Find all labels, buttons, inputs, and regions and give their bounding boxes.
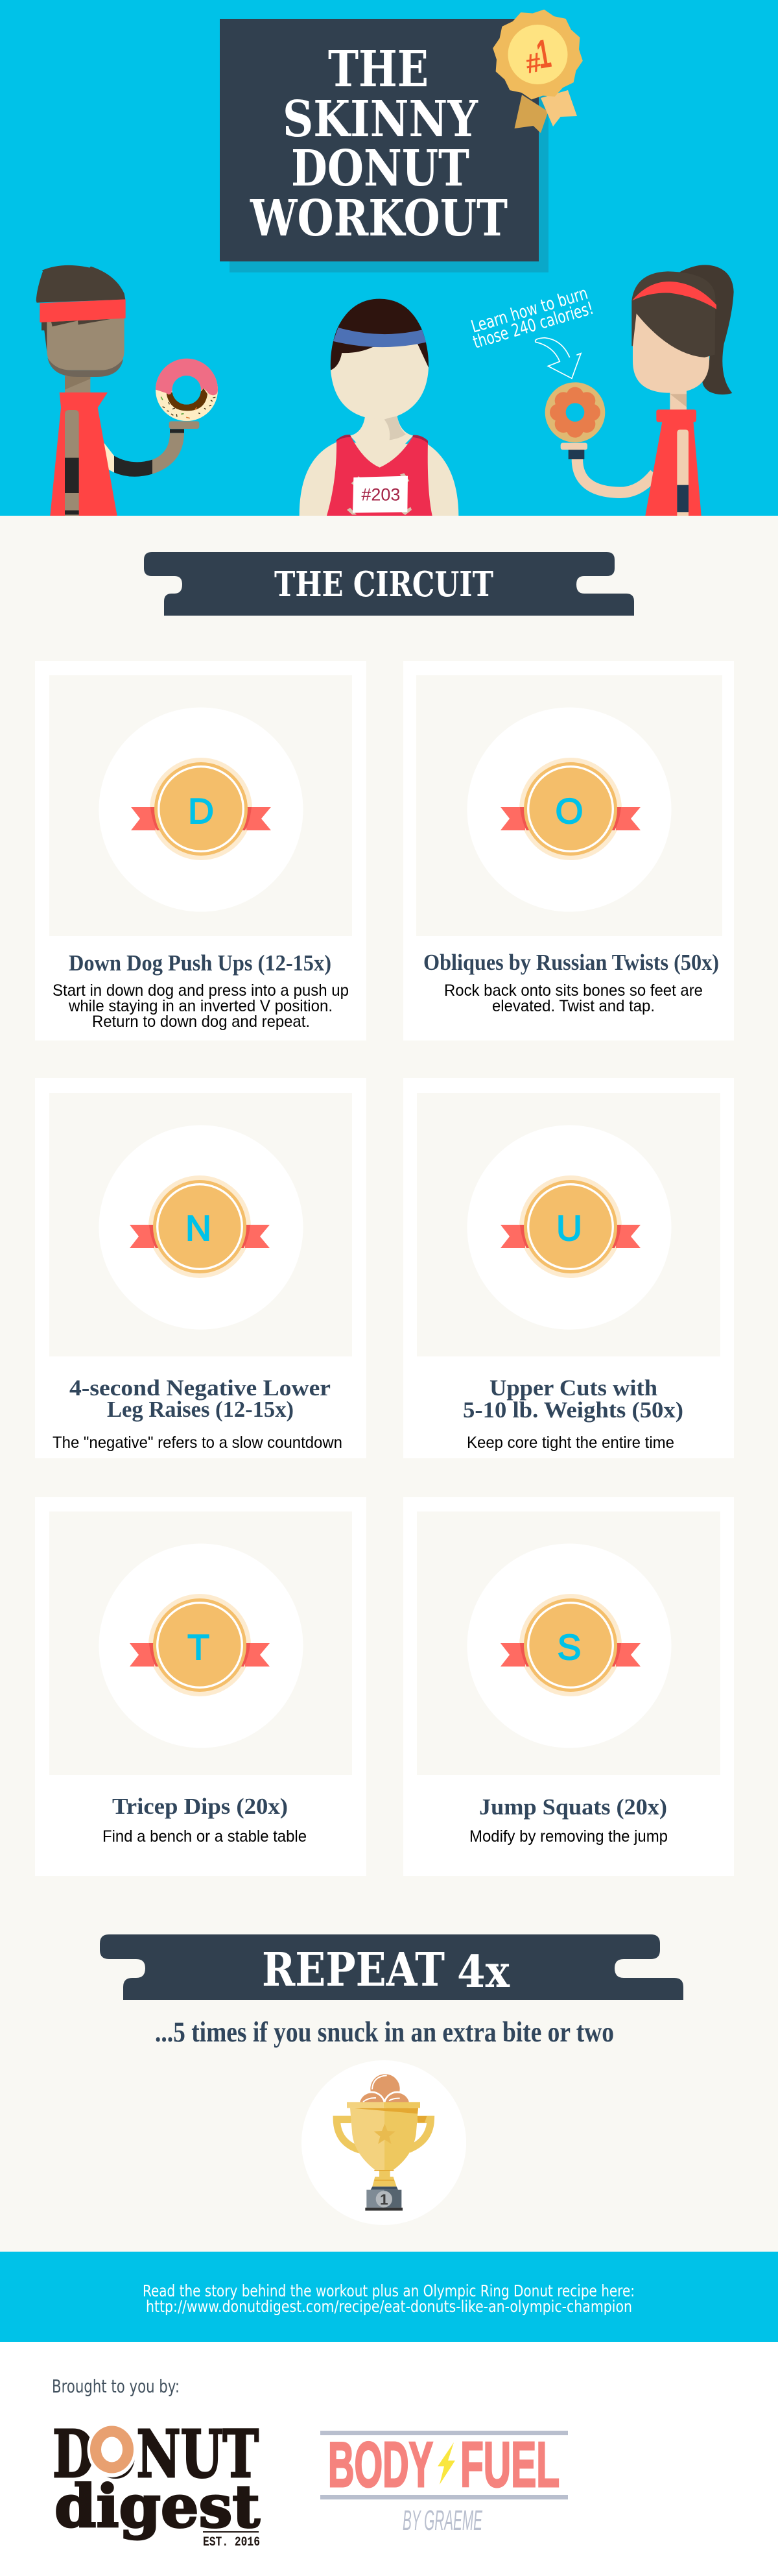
left runner fringe <box>51 319 110 326</box>
icon: number one medal <box>486 3 589 133</box>
link band: http://www.donutdigest.com/recipe/eat-donuts-like-an-olympic-champion <box>146 2297 632 2316</box>
icon: trophy with donuts <box>301 2060 466 2225</box>
donut holes <box>359 2074 410 2118</box>
left runner with pink donut <box>36 265 218 516</box>
text T: Find a bench or a stable table <box>102 1827 307 1846</box>
badge T <box>130 1594 270 1696</box>
logo: body fuel: FUEL <box>460 2429 560 2500</box>
badge S: S <box>558 1627 581 1667</box>
text D: Start in down dog and press into a push up <box>53 981 349 1000</box>
race bib #203: #203 <box>361 485 400 505</box>
left runner headband <box>40 299 126 322</box>
trophy base <box>365 2187 403 2211</box>
badge U <box>501 1175 641 1278</box>
section background <box>0 516 778 2252</box>
badge D <box>131 758 271 860</box>
right runner face <box>633 305 709 393</box>
badge U: U <box>556 1208 582 1248</box>
title T: Tricep Dips (20x) <box>112 1794 288 1819</box>
icon: pink frosted donut <box>156 359 218 421</box>
heading: repeat 4x: 4x <box>457 1946 510 1998</box>
logo: donut digest: digest <box>54 2472 260 2541</box>
badge T: T <box>187 1627 209 1667</box>
icon: number one medal: 1 <box>534 31 554 78</box>
right runner with glazed donut <box>536 265 734 516</box>
title N: Leg Raises (12-15x) <box>107 1397 294 1422</box>
title panel: WORKOUT <box>250 189 508 248</box>
panel: D down dog push ups <box>35 661 366 1041</box>
title panel: DONUT <box>291 139 469 198</box>
text O <box>444 981 703 1015</box>
callout: burn calories: Learn how to burn <box>469 283 590 337</box>
icon: orange glazed donut <box>545 382 605 442</box>
title panel <box>220 19 548 272</box>
donut letter O <box>87 2422 136 2477</box>
text S: Modify by removing the jump <box>469 1827 668 1846</box>
heading: repeat 4x: REPEAT <box>262 1942 445 1997</box>
hero background <box>0 0 778 516</box>
link band <box>0 2252 778 2342</box>
badge S <box>501 1594 641 1696</box>
right runner shirt <box>645 409 701 516</box>
panel: T tricep dips <box>35 1497 366 1876</box>
title O: Obliques by Russian Twists (50x) <box>423 950 719 975</box>
text O: elevated. Twist and tap. <box>492 997 655 1015</box>
footer background <box>0 2342 778 2576</box>
left runner hair <box>36 265 125 352</box>
centre runner hair <box>331 299 429 370</box>
subheading: extra bite: ...5 times if you snuck in an extra bite or two <box>155 2016 614 2048</box>
centre runner tank top <box>327 435 432 516</box>
right runner raised arm <box>561 443 655 492</box>
left runner raised arm <box>102 421 199 477</box>
logo: body fuel <box>320 2429 568 2536</box>
right runner headband <box>632 282 716 309</box>
text U: Keep core tight the entire time <box>467 1434 674 1452</box>
title U: Upper Cuts with <box>489 1375 657 1401</box>
logo: donut digest: EST. 2016 <box>203 2535 260 2550</box>
panel: O obliques <box>403 661 734 1041</box>
title S: Jump Squats (20x) <box>479 1794 667 1820</box>
title N: 4-second Negative Lower <box>69 1375 331 1401</box>
right runner lowered arm <box>677 429 689 516</box>
race bib #203 <box>347 473 412 515</box>
left runner face <box>47 318 124 370</box>
right runner neck <box>670 391 687 410</box>
title panel: THE <box>328 40 429 99</box>
text N: The "negative" refers to a slow countdown <box>53 1434 342 1452</box>
left runner neck <box>65 375 90 394</box>
panel: N negative leg raises <box>35 1078 366 1458</box>
left runner chin shadow <box>47 358 123 377</box>
heading: the circuit <box>144 552 634 616</box>
icon: number one medal: # <box>523 47 543 79</box>
centre runner face <box>331 344 429 418</box>
heading: repeat 4x <box>100 1934 683 2000</box>
credit label: Brought to you by: <box>52 2376 180 2397</box>
logo: body fuel: BY GRAEME <box>403 2505 482 2536</box>
title U <box>463 1375 683 1423</box>
logo: donut digest <box>53 2416 260 2550</box>
centre runner headband <box>333 328 426 347</box>
title U: 5-10 lb. Weights (50x) <box>463 1397 683 1423</box>
badge N <box>130 1175 270 1278</box>
trophy cup <box>347 2102 427 2187</box>
trophy handles <box>336 2119 430 2150</box>
panel: S jump squats <box>403 1497 734 1876</box>
right runner ponytail <box>679 265 734 394</box>
arrow to donut <box>536 338 581 378</box>
centre runner neck <box>350 415 413 469</box>
centre runner shoulders <box>300 442 458 516</box>
text D <box>53 981 349 1031</box>
logo: body fuel: BODY <box>328 2429 433 2500</box>
heading: the circuit: THE CIRCUIT <box>274 564 493 605</box>
text O: Rock back onto sits bones so feet are <box>444 981 703 1000</box>
right runner hair <box>631 271 715 357</box>
text D: while staying in an inverted V position. <box>68 997 333 1015</box>
title N <box>69 1375 331 1422</box>
centre runner with bib <box>300 299 458 516</box>
title panel: SKINNY <box>283 90 478 149</box>
link band: Read the story behind the workout plus an Olympic Ring Donut recipe here: <box>143 2281 635 2300</box>
icon: lightning bolt <box>438 2442 455 2485</box>
callout: burn calories: those 240 calories! <box>471 298 596 353</box>
logo: donut digest: DONUT <box>53 2416 259 2492</box>
badge O <box>501 758 641 860</box>
badge O: O <box>556 791 583 831</box>
text D: Return to down dog and repeat. <box>92 1013 310 1031</box>
panel: U upper cuts <box>403 1078 734 1458</box>
badge N: N <box>185 1208 211 1248</box>
title D: Down Dog Push Ups (12-15x) <box>69 950 331 976</box>
left runner lowered arm <box>65 410 79 516</box>
trophy base: 1 <box>380 2191 388 2208</box>
badge D: D <box>188 791 214 831</box>
left runner shirt <box>50 392 117 516</box>
